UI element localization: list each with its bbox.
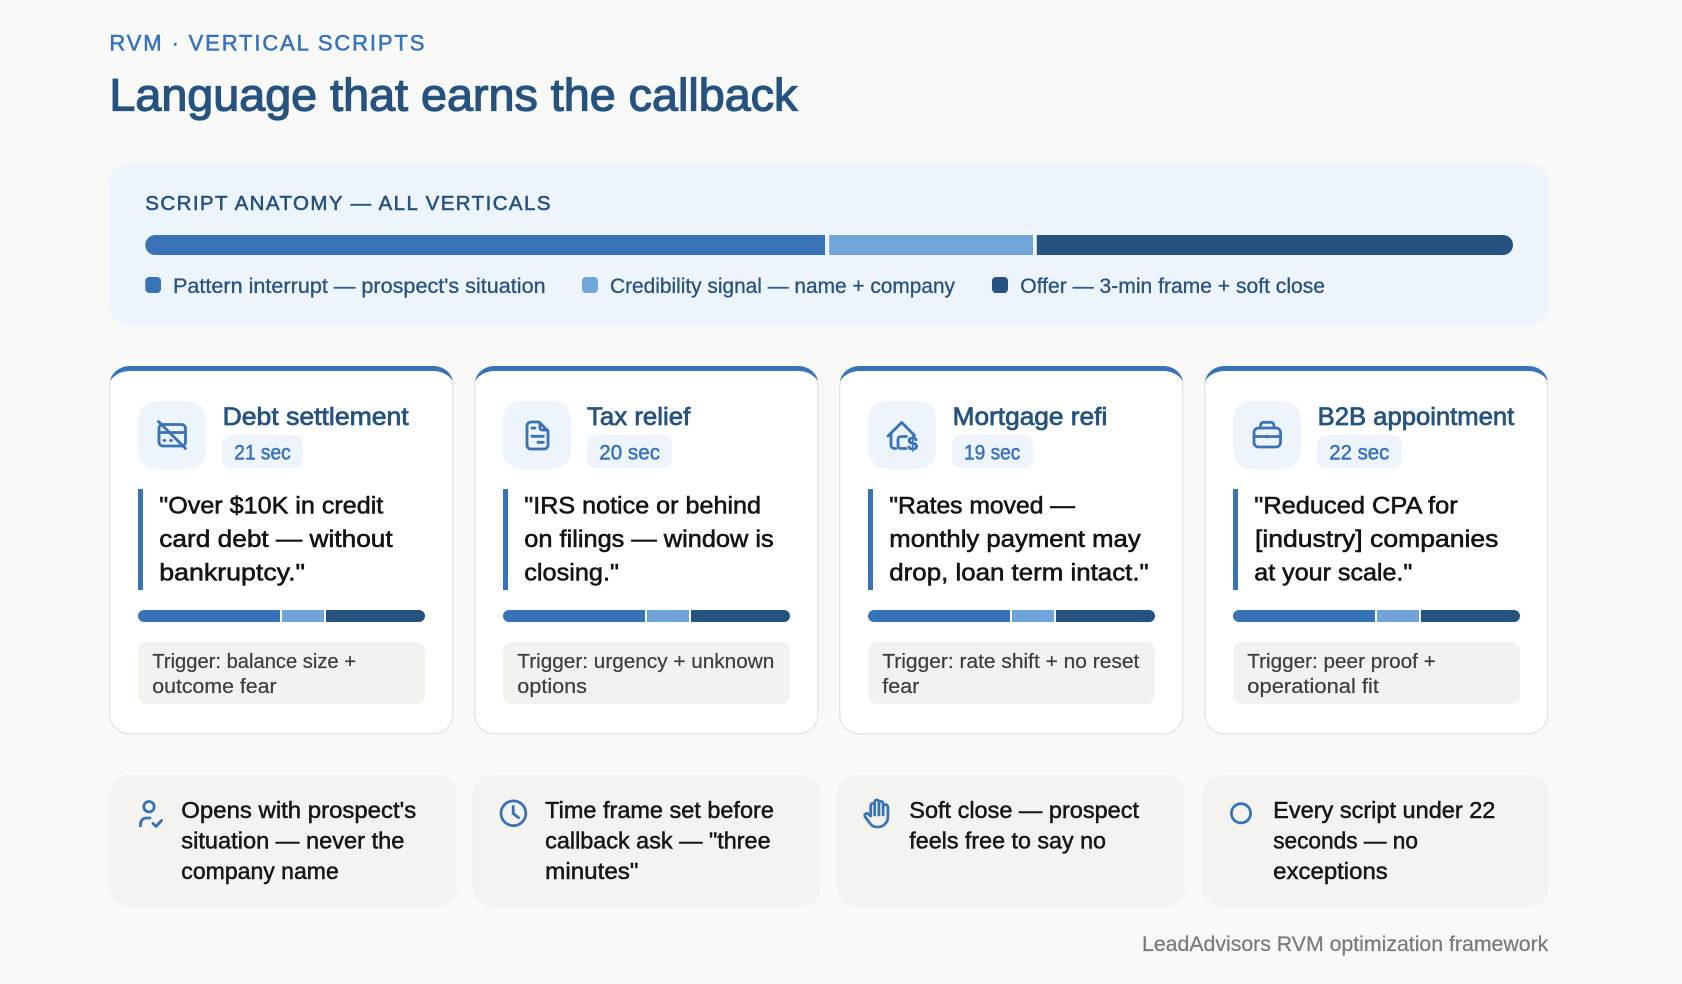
- card heading: Tax relief: [587, 403, 690, 431]
- icon: crossed-out credit card: [138, 401, 206, 469]
- quote: [503, 489, 774, 590]
- stacked anatomy bar: [145, 235, 1513, 255]
- icon: clock: [501, 801, 526, 826]
- card: b2b appointment: [1205, 366, 1548, 734]
- trigger note: Trigger: balance size +: [152, 651, 356, 673]
- trigger note: options: [517, 676, 587, 698]
- trigger note: [1233, 642, 1520, 704]
- quote: closing.": [524, 560, 619, 587]
- card heading: Mortgage refi: [953, 403, 1107, 431]
- trigger note: [868, 642, 1155, 704]
- icon: house with dollar sign: $: [907, 434, 918, 455]
- icon: tax document: [503, 401, 571, 469]
- card: mortgage refi: [840, 366, 1183, 734]
- principle text: [909, 797, 1140, 853]
- principle text: [1273, 797, 1495, 884]
- principle text: company name: [181, 858, 339, 884]
- eyebrow: RVM · VERTICAL SCRIPTS: [109, 31, 424, 56]
- trigger note: fear: [882, 676, 920, 698]
- quote: monthly payment may: [889, 526, 1141, 553]
- principle text: [545, 797, 774, 884]
- principle text: Time frame set before: [545, 797, 774, 823]
- card heading: Debt settlement: [223, 403, 409, 431]
- duration pill: [587, 435, 672, 468]
- trigger note: [503, 642, 790, 704]
- duration pill: [222, 435, 303, 468]
- quote: [1233, 489, 1498, 590]
- principle text: exceptions: [1273, 858, 1388, 884]
- panel heading: SCRIPT ANATOMY — ALL VERTICALS: [145, 192, 551, 215]
- principle text: Every script under 22: [1273, 797, 1495, 823]
- principle text: [181, 797, 416, 884]
- icon: person with check: [140, 802, 162, 826]
- principle text: feels free to say no: [909, 827, 1106, 853]
- quote: "Rates moved —: [889, 493, 1075, 520]
- card: debt settlement: [110, 366, 453, 734]
- principle: soft close: [837, 775, 1185, 907]
- duration pill: 21 sec: [234, 441, 291, 464]
- quote: at your scale.": [1254, 560, 1412, 587]
- mini anatomy bar: [1233, 610, 1520, 622]
- principle text: seconds — no: [1273, 827, 1418, 853]
- duration pill: 20 sec: [599, 441, 660, 464]
- title: Language that earns the callback: [109, 70, 798, 121]
- quote: [industry] companies: [1255, 526, 1498, 553]
- quote: drop, loan term intact.": [889, 560, 1149, 587]
- legend: pattern interrupt: Pattern interrupt — prospect's situation: [173, 275, 546, 298]
- mini anatomy bar: [503, 610, 790, 622]
- principle text: situation — never the: [181, 827, 404, 853]
- principle: opens with prospect's situation: [109, 775, 457, 907]
- legend: offer: Offer — 3-min frame + soft close: [1020, 275, 1325, 298]
- principle text: minutes": [545, 858, 638, 884]
- principle: time frame: [473, 775, 821, 907]
- principle: under 22 seconds: [1201, 775, 1549, 907]
- trigger note: [138, 642, 425, 704]
- quote: on filings — window is: [524, 526, 774, 553]
- quote: "Reduced CPA for: [1254, 493, 1458, 520]
- legend: credibility signal: Credibility signal — name + company: [610, 275, 955, 298]
- quote: "IRS notice or behind: [524, 493, 761, 520]
- duration pill: [1317, 435, 1402, 468]
- principle text: callback ask — "three: [545, 827, 771, 853]
- quote: "Over $10K in credit: [159, 493, 383, 520]
- duration pill: 22 sec: [1329, 441, 1389, 464]
- trigger note: outcome fear: [152, 676, 277, 698]
- duration pill: 19 sec: [964, 441, 1020, 464]
- mini anatomy bar: [868, 610, 1155, 622]
- source footer: LeadAdvisors RVM optimization framework: [1142, 933, 1549, 956]
- icon: house with dollar sign: [868, 401, 936, 469]
- quote: [138, 489, 393, 590]
- principle text: Opens with prospect's: [181, 797, 416, 823]
- principle text: Soft close — prospect: [909, 797, 1140, 823]
- duration pill: [952, 435, 1033, 468]
- panel: script anatomy: [109, 162, 1549, 326]
- trigger note: Trigger: rate shift + no reset: [882, 651, 1140, 673]
- quote: [868, 489, 1149, 590]
- icon: circle: [1231, 804, 1251, 823]
- card heading: B2B appointment: [1318, 403, 1514, 431]
- icon: raised hand: [865, 800, 888, 827]
- trigger note: Trigger: urgency + unknown: [517, 651, 774, 673]
- card: tax relief: [475, 366, 818, 734]
- icon: briefcase: [1233, 401, 1301, 469]
- quote: bankruptcy.": [159, 560, 305, 587]
- quote: card debt — without: [159, 526, 393, 553]
- mini anatomy bar: [138, 610, 425, 622]
- trigger note: operational fit: [1247, 676, 1379, 698]
- trigger note: Trigger: peer proof +: [1247, 651, 1436, 673]
